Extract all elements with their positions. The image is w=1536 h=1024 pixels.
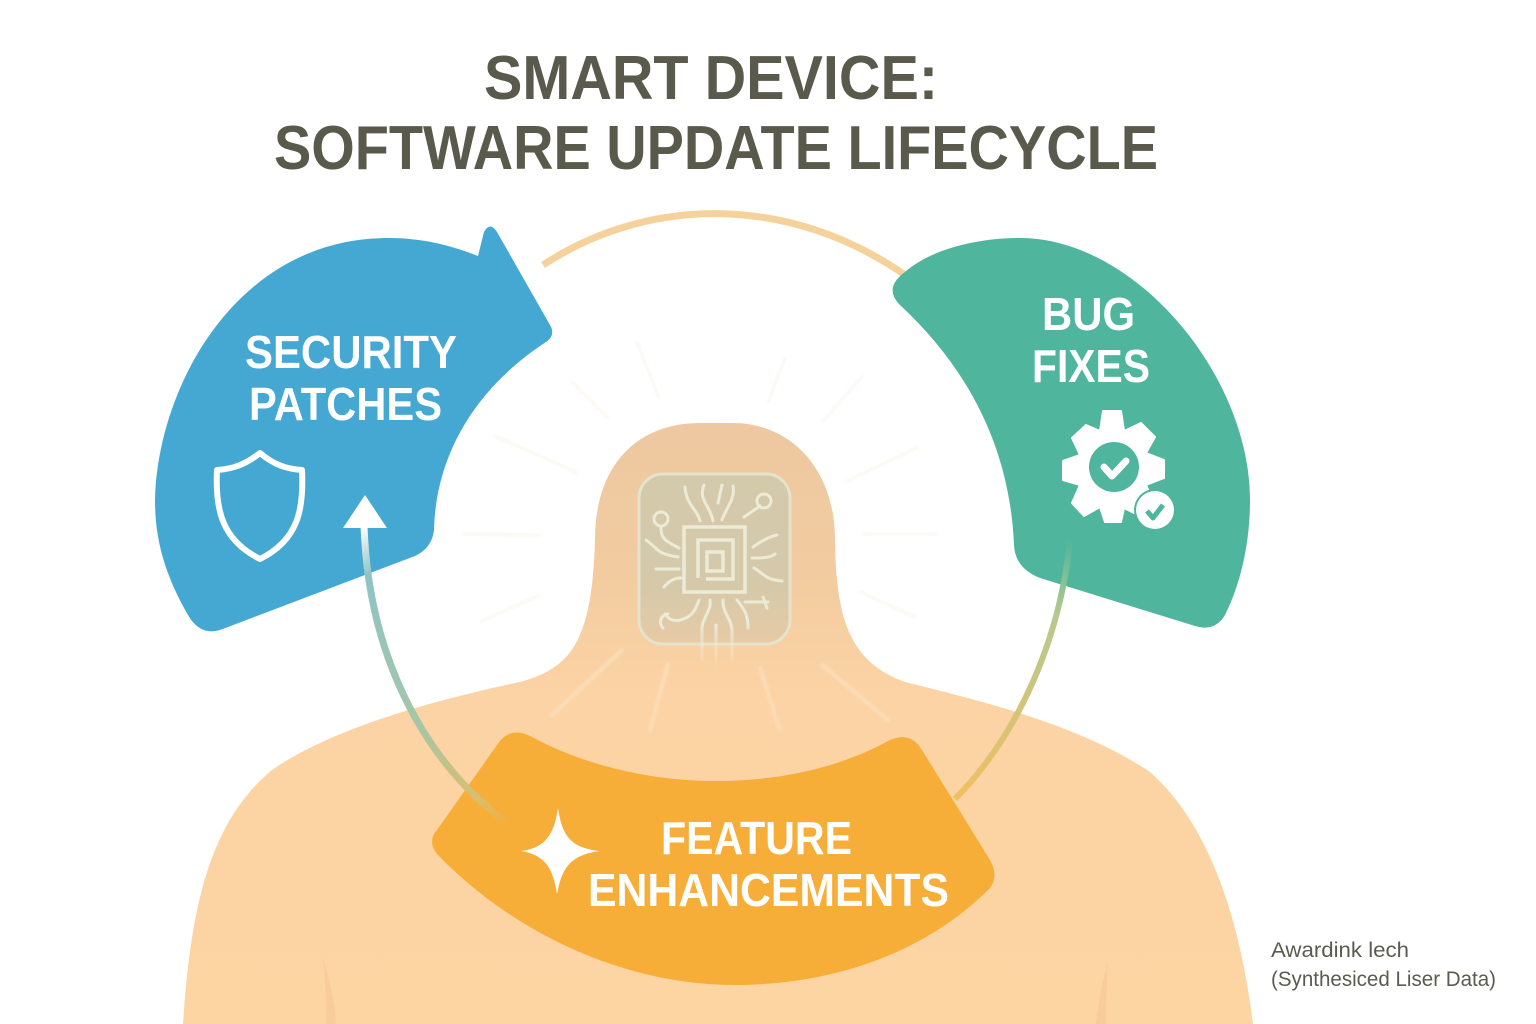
title (274, 44, 1158, 183)
label: security patches (245, 326, 457, 430)
arc: left connector arrow (343, 495, 510, 825)
icon: sparkle (521, 808, 600, 894)
title: SMART DEVICE: (484, 44, 938, 113)
source note: Awardink lech (1271, 939, 1409, 962)
label: bug fixes (1032, 288, 1150, 392)
panel: security patches (155, 226, 552, 631)
label: security patches: PATCHES (249, 378, 442, 430)
source note: (Synthesiced Liser Data) (1271, 968, 1496, 991)
label: security patches: SECURITY (245, 326, 457, 378)
label: feature enhancements (588, 812, 949, 916)
icon: shield (217, 453, 302, 559)
glow rays around chip (463, 342, 938, 622)
label: feature enhancements: ENHANCEMENTS (588, 864, 949, 916)
label: feature enhancements: FEATURE (661, 812, 852, 864)
shoulder creases (322, 955, 1108, 1024)
person silhouette (183, 423, 1253, 1024)
label: bug fixes: FIXES (1032, 340, 1150, 392)
source note (1271, 939, 1496, 991)
arc: top connector (543, 214, 905, 275)
panel: feature enhancements (432, 732, 994, 985)
icon: chip (639, 474, 790, 665)
glow below chip (552, 650, 888, 730)
arc: right connector (955, 540, 1070, 799)
label: bug fixes: BUG (1042, 288, 1135, 340)
title: SOFTWARE UPDATE LIFECYCLE (274, 114, 1158, 183)
panel: bug fixes (893, 238, 1250, 628)
icon: gear with check (1063, 411, 1176, 531)
